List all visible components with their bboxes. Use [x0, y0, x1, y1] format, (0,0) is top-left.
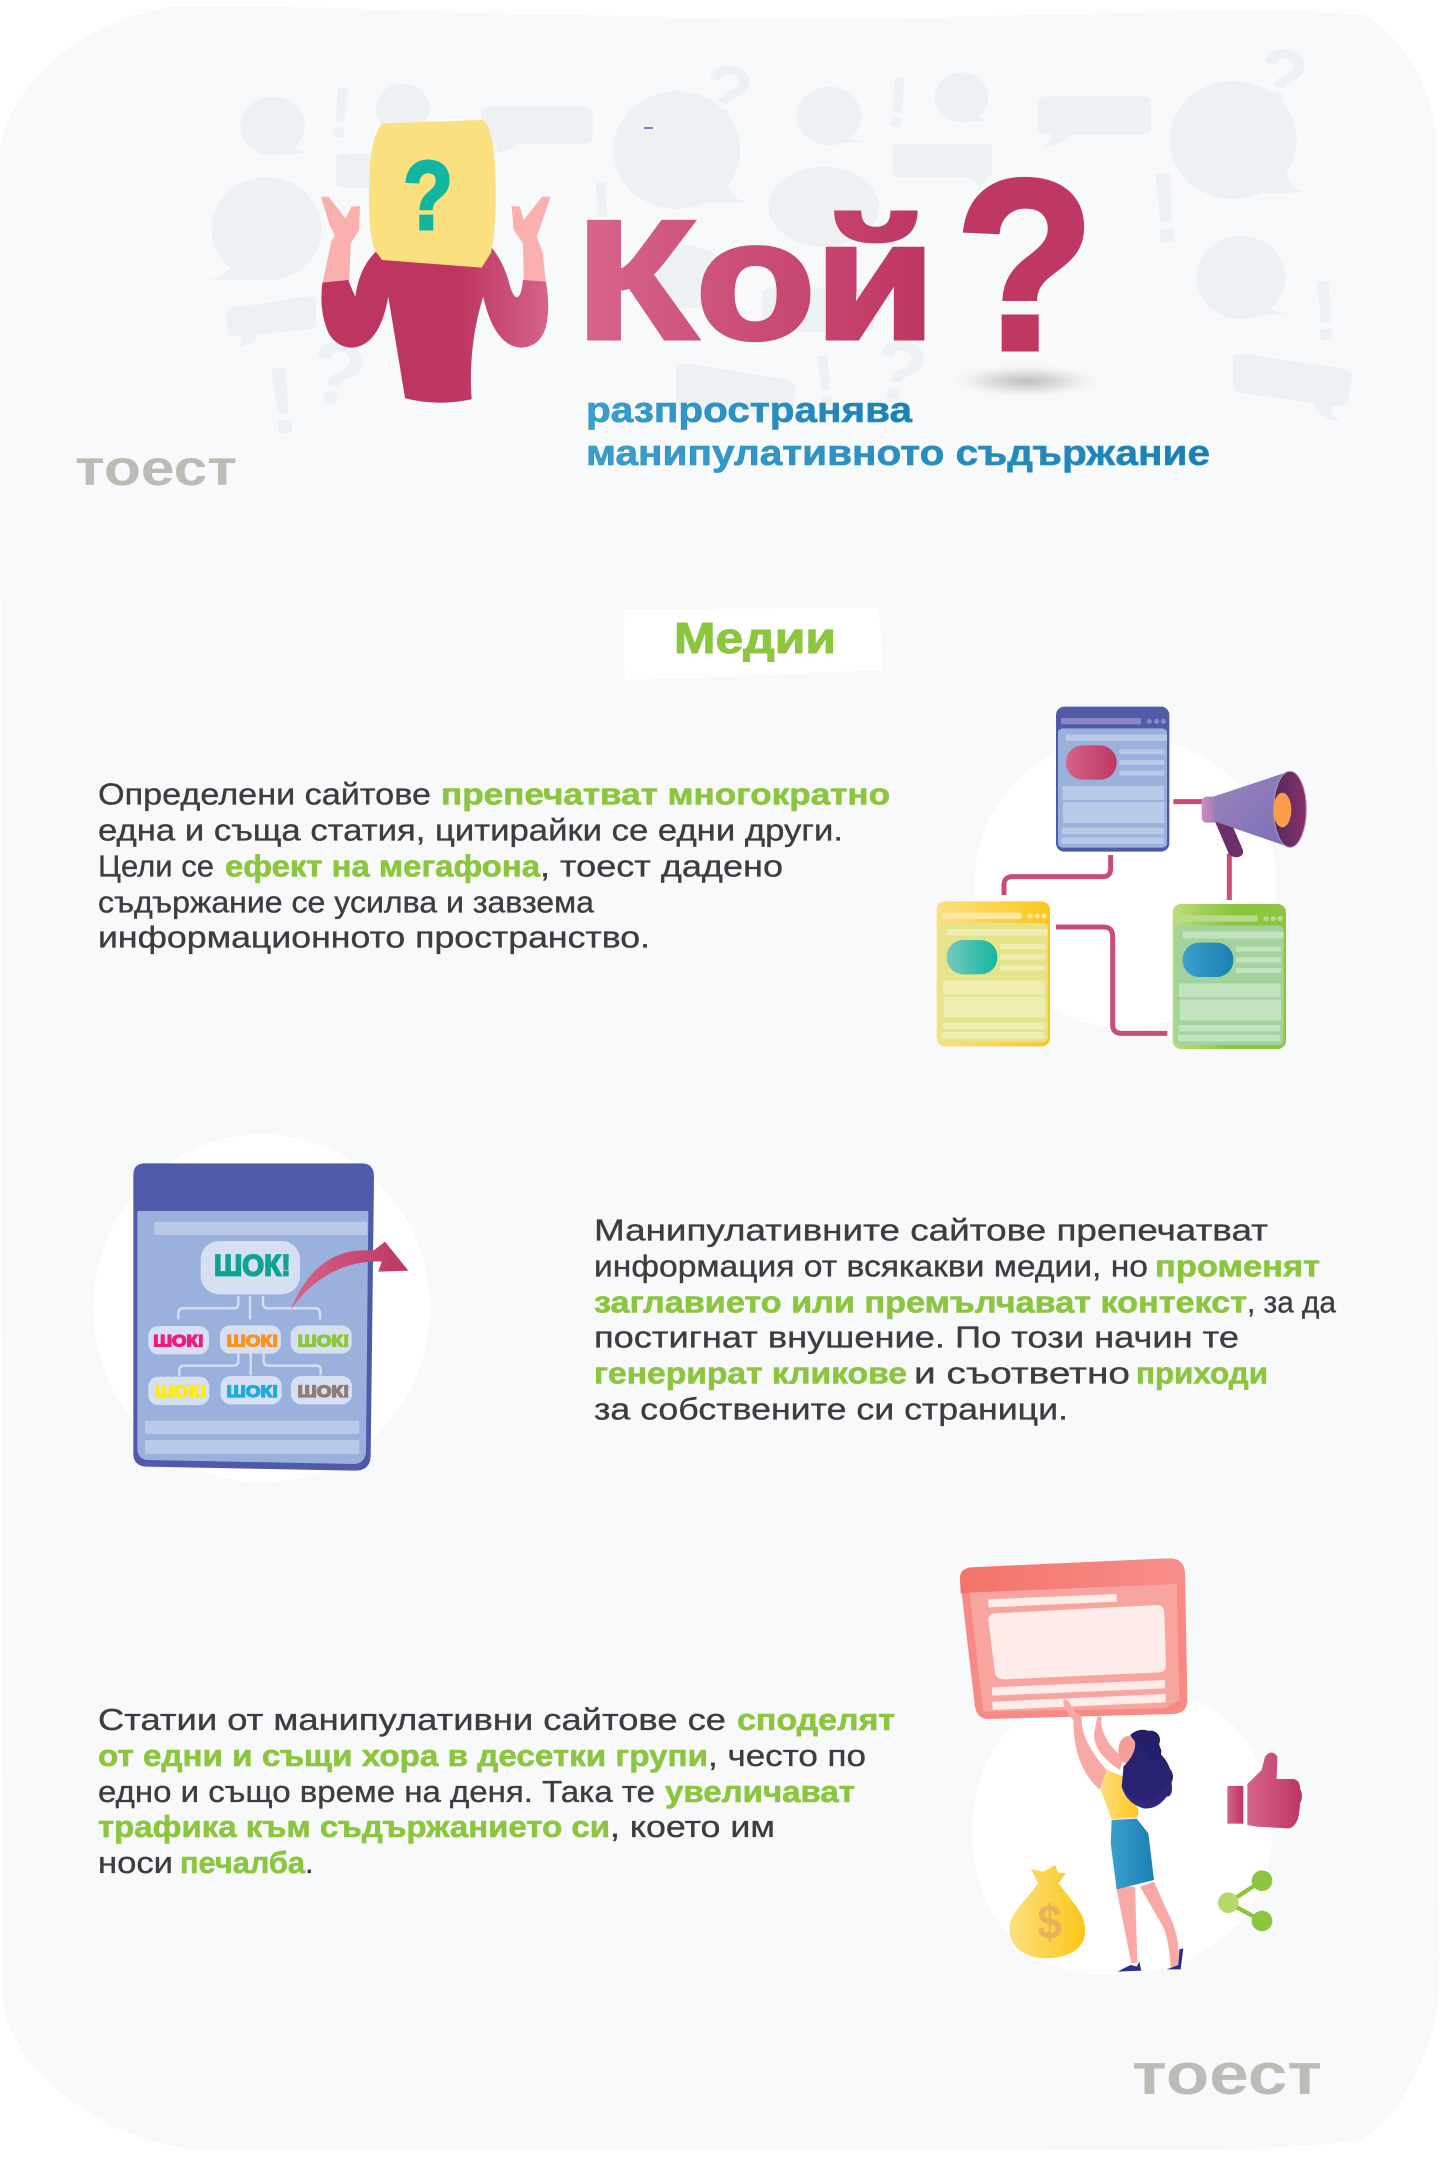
text block 1: една и съща статия, цитирайки се едни други. — [98, 812, 843, 848]
background speech bubbles: ! — [260, 346, 304, 456]
text block 1: информационното пространство. — [98, 920, 650, 954]
text block 3: , което им — [610, 1809, 775, 1844]
icon: share — [1218, 1870, 1272, 1931]
background speech bubbles: ! — [325, 72, 356, 154]
main pill — [201, 1241, 300, 1294]
background speech bubbles: ! — [587, 167, 617, 249]
icon: megaphone — [1202, 771, 1306, 857]
text block 1 — [98, 776, 890, 954]
text block 2 — [594, 1212, 1337, 1426]
text block 3: , често по — [708, 1738, 866, 1773]
small pills: ШОК! — [155, 1382, 206, 1401]
text block 2: променят — [1155, 1248, 1320, 1284]
small pills: ШОК! — [298, 1382, 349, 1401]
window — [133, 1163, 374, 1471]
text block 2: и съответно — [914, 1356, 1130, 1390]
flow connectors — [178, 1296, 321, 1376]
text block 3: носи — [98, 1845, 173, 1880]
yellow card — [369, 120, 496, 268]
text block 2: постигнат внушение. По този начин те — [594, 1320, 1239, 1354]
heading tag: Медии: Медии — [674, 614, 836, 663]
text block 1: Определени сайтове — [98, 776, 431, 812]
background speech bubbles — [208, 29, 1352, 456]
background speech bubbles: ? — [864, 320, 935, 423]
connectors — [1004, 802, 1229, 1033]
body — [321, 247, 548, 403]
right arm — [511, 197, 551, 283]
text block 1: съдържание се усилва и завзема — [98, 884, 595, 920]
background speech bubbles: ! — [882, 62, 913, 144]
text block 2: за собствените си страници. — [594, 1392, 1068, 1426]
subtitle: манипулативното съдържание — [586, 432, 1210, 473]
subtitle — [586, 389, 1210, 473]
background speech bubbles: ! — [1308, 263, 1343, 360]
window: blue — [1056, 707, 1169, 852]
main pill: ШОК! — [214, 1250, 291, 1283]
arrow — [291, 1242, 408, 1310]
title: Кой — [577, 186, 935, 374]
illustration: woman with web panel — [960, 1558, 1302, 1975]
question mark on card: ? — [403, 141, 453, 250]
text block 3: едно и също време на деня. Така те — [98, 1774, 655, 1809]
logo top: тоест — [75, 440, 237, 496]
text block 3: от едни и същи хора в десетки групи — [98, 1738, 708, 1773]
woman — [1063, 1700, 1183, 1972]
question mark shadow — [944, 363, 1108, 399]
icon: money bag — [1009, 1865, 1085, 1958]
text block 2: заглавието или премълчават контекст — [594, 1284, 1247, 1320]
small pills: ШОК! — [153, 1332, 204, 1351]
text block 2: информация от всякакви медии, но — [594, 1248, 1148, 1284]
text block 3: споделят — [737, 1702, 895, 1737]
text block 1: ефект на мегафона — [225, 848, 541, 884]
text block 3: трафика към съдържанието си — [98, 1809, 610, 1844]
small pills — [148, 1325, 352, 1405]
subtitle: разпространява — [586, 389, 913, 430]
text block 2: генерират кликове — [594, 1356, 907, 1390]
small pills: ШОК! — [298, 1332, 349, 1351]
white circle — [975, 736, 1277, 1027]
heading tag: Медии — [624, 607, 883, 680]
text block 1: препечатват многократно — [441, 776, 890, 812]
text block 3 — [98, 1702, 895, 1880]
illustration: websites and megaphone — [937, 707, 1306, 1049]
window: green — [1173, 904, 1286, 1049]
text block 3: увеличават — [665, 1774, 855, 1809]
background speech bubbles: ! — [809, 340, 841, 422]
small pills: ШОК! — [227, 1382, 278, 1401]
icon: person with question-mark card — [321, 120, 551, 403]
text block 3: печалба — [180, 1845, 306, 1880]
text block 2: Манипулативните сайтове препечатват — [594, 1212, 1268, 1248]
text block 2: , за да — [1247, 1284, 1337, 1320]
white circle — [93, 1134, 430, 1482]
background speech bubbles: ? — [1250, 29, 1315, 125]
text block 3: Статии от манипулативни сайтове се — [98, 1702, 726, 1737]
left arm — [321, 197, 360, 283]
small pills: ШОК! — [227, 1332, 278, 1351]
text block 2: приходи — [1136, 1356, 1268, 1390]
logo bottom: тоест — [1132, 2042, 1322, 2107]
text block 3: . — [305, 1845, 314, 1880]
background speech bubbles: ! — [1145, 151, 1186, 265]
illustration: shock headlines window — [93, 1134, 430, 1482]
icon: thumbs up — [1227, 1752, 1302, 1828]
window: yellow — [937, 901, 1050, 1046]
background speech bubbles: ? — [300, 320, 374, 430]
text block 1: , тоест дадено — [540, 848, 783, 884]
big question mark: ? — [955, 130, 1095, 401]
text block 1: Цели се — [98, 848, 214, 884]
small mark — [644, 127, 653, 129]
white blob — [972, 1693, 1272, 1975]
background speech bubbles: ? — [695, 45, 760, 141]
web panel — [960, 1558, 1187, 1719]
icon: money bag: $ — [1037, 1895, 1062, 1949]
